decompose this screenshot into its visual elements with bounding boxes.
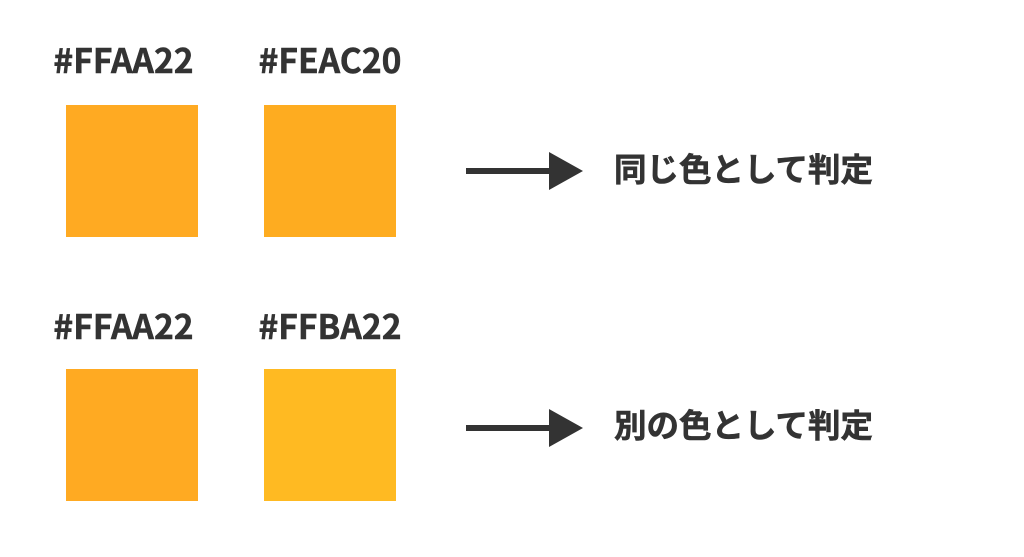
swatch: #FFAA22 top [66, 105, 198, 237]
arrow: bottom [466, 409, 583, 447]
swatch: #FFBA22 [264, 369, 396, 501]
label: #FFBA22: #FFBA22 [258, 300, 402, 349]
arrow: top [466, 152, 583, 190]
swatch: #FFAA22 bottom [66, 369, 198, 501]
text: same colour verdict: 同じ色として判定 [614, 144, 873, 191]
text: different colour verdict: 別の色として判定 [614, 400, 873, 447]
label: #FFAA22 top: #FFAA22 [53, 34, 194, 83]
swatch: #FEAC20 [264, 105, 396, 237]
label: #FFAA22 bottom: #FFAA22 [53, 300, 194, 349]
label: #FEAC20: #FEAC20 [259, 34, 401, 83]
